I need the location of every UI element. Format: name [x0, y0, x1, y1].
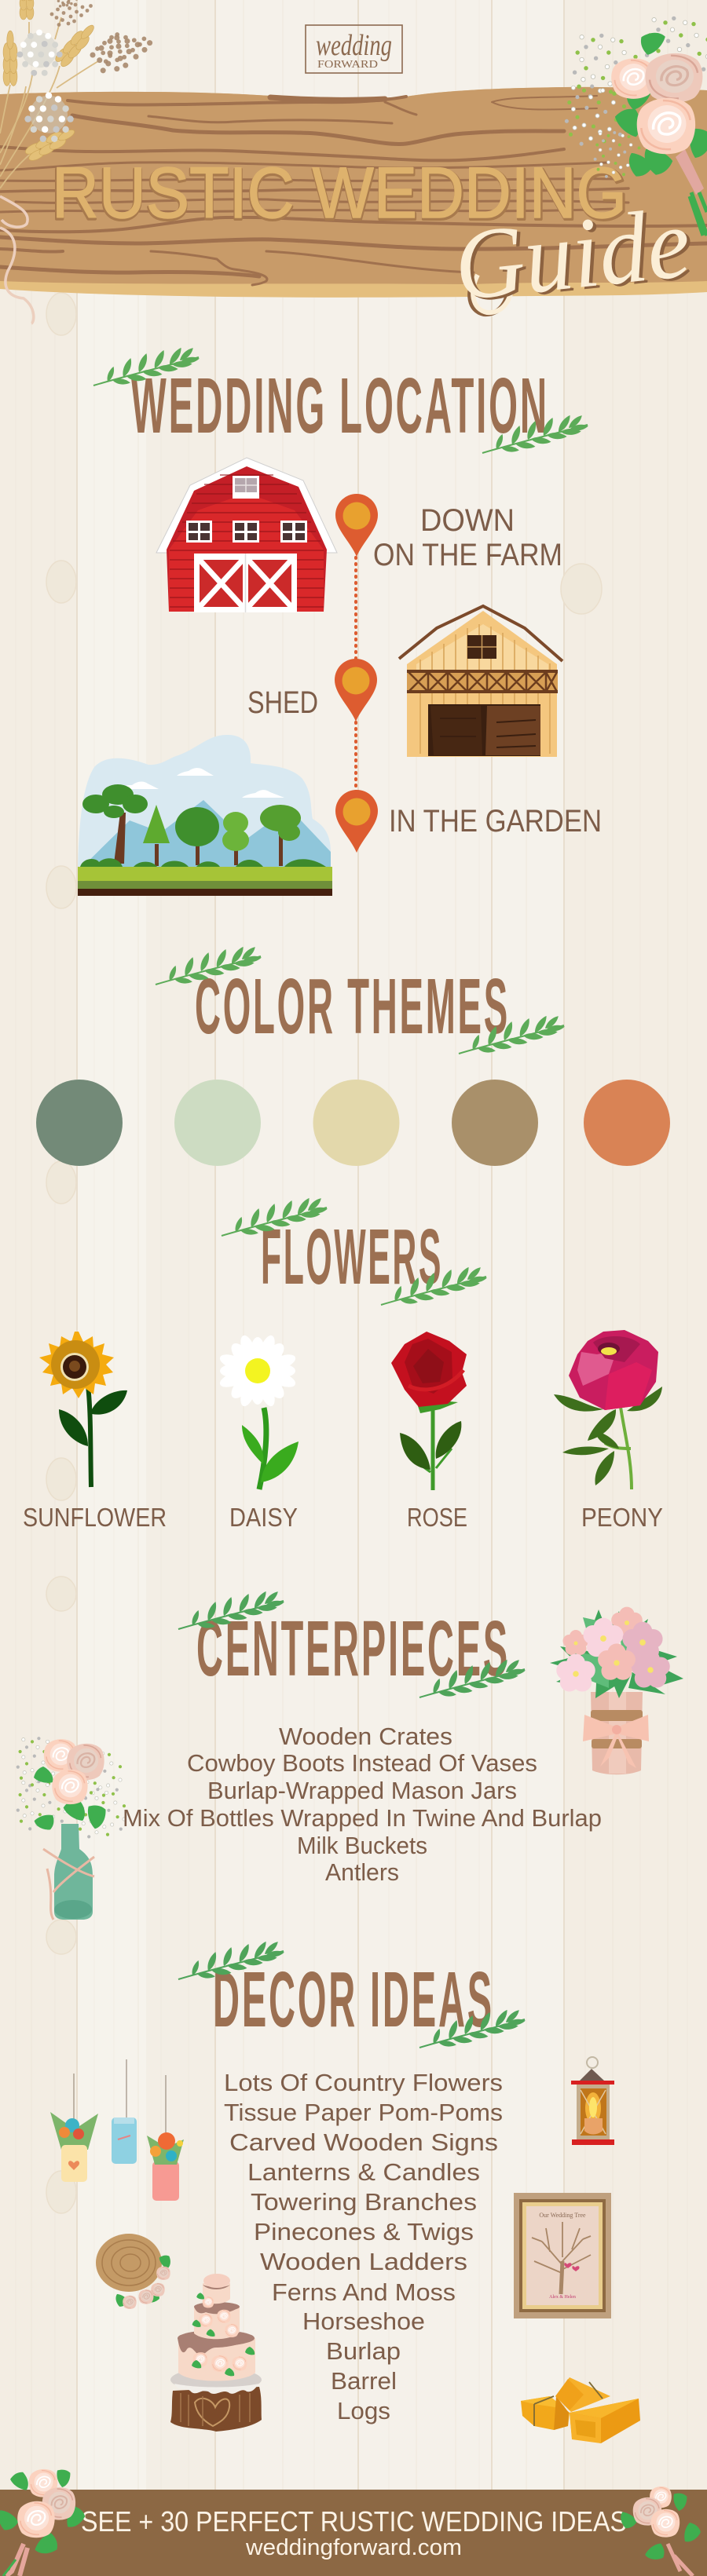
label: down on the farm: DOWN: [420, 503, 515, 538]
label: in the garden: IN THE GARDEN: [389, 804, 602, 839]
icon: pin shed: [335, 659, 377, 722]
flower labels: [23, 1503, 663, 1532]
list: decor ideas: [224, 2069, 503, 2424]
icon: sprig right: [482, 415, 588, 455]
title: guide script: Guide: [452, 188, 698, 323]
list: decor ideas: Logs: [337, 2397, 390, 2424]
section: centerpieces: [16, 1591, 683, 1920]
section: decor ideas: [50, 1941, 640, 2443]
icon: pin farm: [335, 494, 378, 557]
logo: wedding forward: wedding: [316, 29, 392, 62]
title: guide script: Guide: [449, 186, 695, 322]
list: decor ideas: Barrel: [331, 2367, 397, 2395]
footer banner: [0, 2465, 707, 2576]
icon: framed wedding tree: Alex & Helen: [549, 2295, 576, 2300]
list: decor ideas: Ferns And Moss: [272, 2278, 456, 2306]
flower labels: ROSE: [407, 1503, 467, 1532]
title: rustic wedding: RUSTIC WEDDING: [52, 153, 627, 233]
list: decor ideas: Lots Of Country Flowers: [224, 2069, 503, 2096]
icon: footer bouquet right: [617, 2486, 701, 2576]
icon: sprig right: [419, 2009, 526, 2050]
flower: peony: [554, 1330, 662, 1489]
list: centerpieces: Mix Of Bottles Wrapped In Twine And Burlap: [123, 1804, 602, 1832]
icon: framed wedding tree: Our Wedding Tree: [539, 2212, 586, 2219]
list: decor ideas: Burlap: [326, 2337, 401, 2365]
icon: hanging jars: [50, 2059, 184, 2201]
icon: sprig right: [459, 1015, 565, 1056]
header wood plank: [0, 87, 707, 298]
list: centerpieces: Cowboy Boots Instead Of Vases: [187, 1749, 537, 1777]
icon: pin garden: [335, 790, 378, 853]
footer url: weddingforward.com: [245, 2535, 462, 2560]
icon: sprig left: [222, 1197, 328, 1238]
list: decor ideas: Carved Wooden Signs: [229, 2128, 498, 2156]
icon: sprig left: [156, 946, 262, 987]
icon: footer bouquet left: [0, 2465, 85, 2576]
list: decor ideas: Horseshoe: [302, 2307, 425, 2335]
icon: sprig left: [93, 347, 200, 388]
flower labels: PEONY: [581, 1503, 663, 1532]
icon: sprig left: [178, 1941, 284, 1982]
list: centerpieces: [123, 1723, 602, 1886]
list: centerpieces: Milk Buckets: [297, 1832, 427, 1859]
icon: sprig left: [178, 1591, 284, 1631]
title: rustic wedding: RUSTIC WEDDING: [51, 155, 628, 235]
logo: wedding forward: FORWARD: [317, 59, 378, 71]
route line with location pins: [335, 494, 378, 853]
list: decor ideas: Tissue Paper Pom-Poms: [224, 2099, 503, 2126]
list: centerpieces: Antlers: [325, 1858, 399, 1886]
icon: wood slice with roses: [96, 2234, 174, 2309]
flower labels: SUNFLOWER: [23, 1503, 167, 1532]
footer call to action: SEE + 30 PERFECT RUSTIC WEDDING IDEAS: [81, 2505, 627, 2538]
icon: hay bales: [521, 2377, 640, 2443]
section: flowers: FLOWERS: [261, 1213, 443, 1301]
label: down on the farm: ON THE FARM: [373, 538, 562, 572]
icon: tiered cake on stump: [170, 2274, 262, 2432]
illustration: garden landscape: [78, 735, 332, 896]
flower: daisy: [218, 1333, 299, 1489]
icon: red barn: [156, 458, 337, 612]
flower: sunflower: [39, 1332, 127, 1487]
label: down on the farm: [373, 503, 562, 572]
logo: wedding forward: [306, 25, 402, 73]
list: decor ideas: Pinecones & Twigs: [254, 2218, 474, 2245]
label: shed: SHED: [247, 685, 318, 720]
icon: dried wheat bouquet: [0, 0, 152, 323]
icon: bottle bouquet: [16, 1737, 126, 1920]
flower labels: DAISY: [229, 1503, 298, 1532]
icon: mason jar bouquet: [550, 1607, 683, 1774]
icon: framed wedding tree: [514, 2193, 611, 2318]
icon: sprig right: [381, 1266, 487, 1307]
list: decor ideas: Towering Branches: [251, 2188, 477, 2216]
color swatches: [36, 1080, 670, 1166]
list: decor ideas: Wooden Ladders: [260, 2248, 467, 2275]
list: centerpieces: Burlap-Wrapped Mason Jars: [207, 1777, 517, 1804]
section: wedding location: [78, 347, 602, 896]
icon: rose bouquet with baby's breath: [565, 16, 707, 236]
icon: lantern: [571, 2057, 614, 2145]
section: color themes: [36, 946, 670, 1166]
icon: sprig right: [419, 1659, 526, 1700]
section: flowers: [23, 1197, 663, 1532]
icon: wooden shed barn: [399, 606, 562, 757]
flower: rose: [391, 1332, 467, 1490]
list: decor ideas: Lanterns & Candles: [247, 2158, 480, 2186]
list: centerpieces: Wooden Crates: [279, 1723, 452, 1750]
